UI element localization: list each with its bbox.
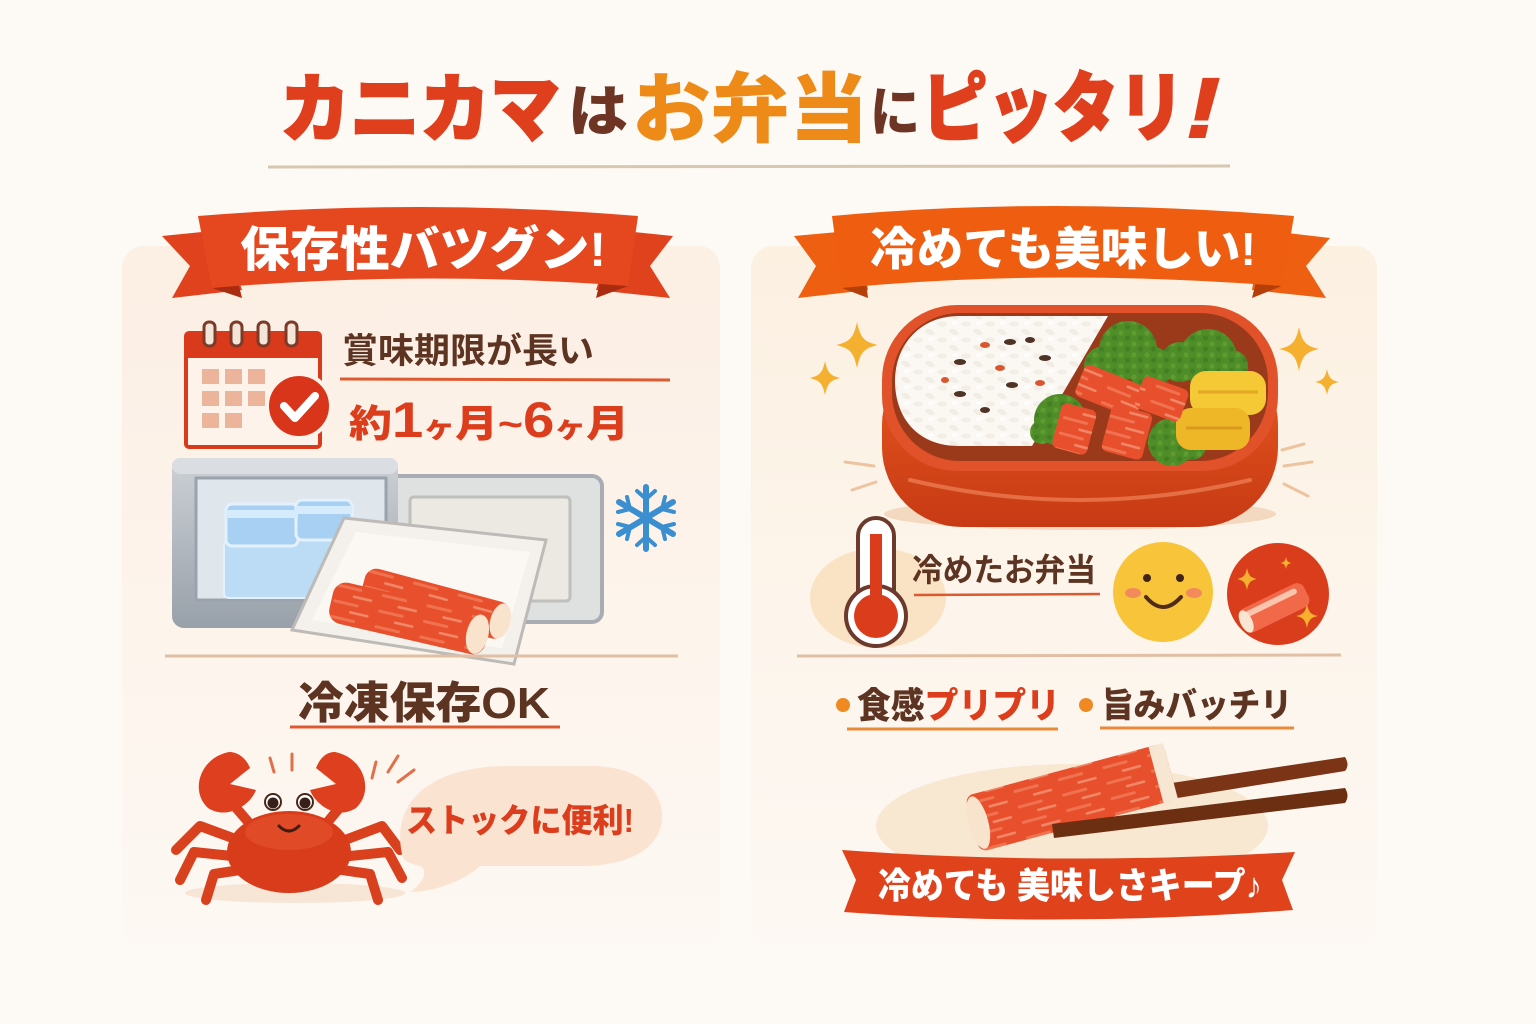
text: best before: 賞味期限が長い xyxy=(342,332,594,371)
ribbon: taste heading xyxy=(794,206,1330,298)
title: ! xyxy=(1186,61,1220,155)
rice xyxy=(895,316,1108,446)
text: period: 約1ヶ月~6ヶ月 xyxy=(349,392,629,448)
ribbon: keep taste: 冷めても 美味しさキープ♪ xyxy=(878,865,1262,906)
icon: thermometer xyxy=(810,518,946,648)
icon: calendar xyxy=(186,322,331,447)
icon: crab xyxy=(176,752,414,903)
panel: left storage xyxy=(122,207,720,946)
illustration: bento box xyxy=(882,305,1278,530)
text: umami: 旨みバッチリ xyxy=(1102,687,1292,725)
crab sticks xyxy=(1051,363,1190,461)
text: cold bento: 冷めたお弁当 xyxy=(912,552,1096,588)
speech bubble xyxy=(400,766,662,892)
text: texture: 食感プリプリ xyxy=(857,685,1060,726)
title: カニカマ xyxy=(280,68,560,151)
ribbon: keep taste xyxy=(842,850,1295,920)
speech bubble: ストックに便利! xyxy=(406,802,634,839)
sparkles xyxy=(810,322,1339,395)
title: は xyxy=(568,80,628,143)
broccoli xyxy=(1030,321,1248,466)
title: に xyxy=(870,83,920,143)
icon: crab stick badge xyxy=(1227,543,1329,645)
motion marks xyxy=(845,444,1312,496)
title xyxy=(280,61,1220,155)
title: ピッタリ xyxy=(922,67,1184,152)
panel: right taste xyxy=(751,206,1377,946)
text: frozen storage ok: 冷凍保存OK xyxy=(298,679,550,728)
title: お弁当 xyxy=(632,68,868,153)
illustration: freezer xyxy=(172,458,602,664)
icon: snowflake xyxy=(618,487,674,549)
ribbon: storage heading xyxy=(162,207,673,298)
freezer bag xyxy=(292,518,546,664)
ribbon: storage heading: 保存性バツグン! xyxy=(240,223,606,277)
icon: smiley xyxy=(1113,542,1213,642)
illustration: crab stick with chopsticks xyxy=(876,743,1348,888)
ribbon: taste heading: 冷めても美味しい! xyxy=(870,223,1256,275)
egg xyxy=(1176,371,1266,450)
